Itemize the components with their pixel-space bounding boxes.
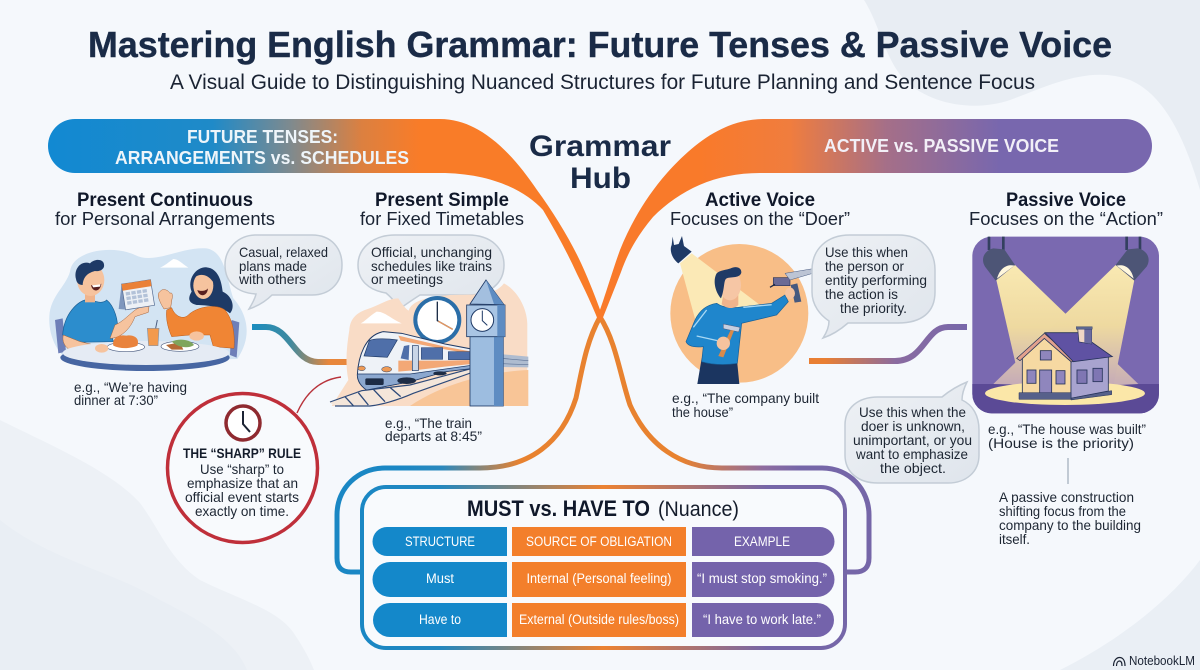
callout: when to use active: entity performing: [825, 272, 927, 288]
table row: have to: [373, 603, 834, 637]
heading: passive voice: [969, 189, 1163, 229]
note: passive construction: itself.: [999, 531, 1030, 547]
callout: casual plans: [225, 235, 342, 309]
illustration: train and clock tower: [330, 280, 528, 406]
example: dinner: e.g., “We’re having: [74, 379, 187, 395]
example: dinner: [74, 379, 187, 408]
example: train: e.g., “The train: [385, 415, 472, 431]
table header row: SOURCE OF OBLIGATION: [526, 534, 672, 549]
heading: present continuous: [55, 189, 275, 229]
connector: arrangements to schedules: [252, 327, 348, 362]
heading: present continuous: Present Continuous: [77, 189, 253, 211]
example: train: departs at 8:45”: [385, 428, 482, 444]
note: passive construction: [999, 489, 1141, 547]
callout: the sharp rule: Use “sharp” to: [200, 461, 284, 477]
table row: have to: Have to: [419, 612, 461, 627]
banner: future tenses: ARRANGEMENTS vs. SCHEDULES: [115, 148, 409, 168]
callout: the sharp rule: official event starts: [185, 489, 299, 505]
heading: present continuous: for Personal Arrangements: [55, 209, 275, 229]
heading: active voice: Active Voice: [705, 189, 815, 211]
table header row: STRUCTURE: [405, 534, 475, 549]
example: company built: [672, 390, 819, 420]
example: company built: the house”: [672, 404, 733, 420]
grammar hub label: Hub: [570, 162, 631, 195]
connecting hub curves to table frame: [337, 317, 869, 572]
illustration: active doer with spotlight: [670, 236, 815, 384]
table row: must: [372, 562, 834, 597]
callout: when to use active: [812, 235, 935, 338]
illustration: friends planning dinner: [49, 248, 247, 371]
callout: when to use passive: the object.: [880, 460, 946, 476]
table row: must: Internal (Personal feeling): [526, 571, 672, 586]
callout: casual plans: with others: [238, 271, 306, 287]
heading: active voice: [670, 189, 850, 229]
callout: when to use passive: Use this when the: [859, 404, 966, 420]
subtitle: A Visual Guide to Distinguishing Nuanced Structures for Future Planning and Sentence Focus: [170, 71, 1035, 94]
callout: the sharp rule: THE “SHARP” RULE: [183, 445, 301, 461]
callout: when to use passive: [845, 382, 979, 483]
example: train: [385, 415, 482, 444]
illustration: house under spotlights: [972, 237, 1159, 413]
callout: when to use active: the person or: [825, 258, 904, 274]
banner: future tenses: [48, 119, 603, 320]
callout: when to use passive: want to emphasize: [855, 446, 968, 462]
table header row: EXAMPLE: [734, 534, 790, 549]
heading: present simple: Present Simple: [375, 189, 509, 211]
logo: notebooklm: NotebookLM: [1129, 654, 1195, 668]
table heading: (Nuance): [658, 498, 739, 521]
callout: casual plans: Casual, relaxed: [239, 244, 328, 260]
callout: casual plans: plans made: [239, 258, 307, 274]
callout: official schedules: schedules like trains: [371, 258, 492, 274]
example: house was built: e.g., “The house was built”: [988, 421, 1146, 437]
example: house was built: (House is the priority): [988, 435, 1134, 451]
icon: clock: [226, 406, 260, 440]
callout: when to use active: the priority.: [840, 300, 907, 316]
table row: must: “I must stop smoking.”: [697, 571, 827, 586]
callout: when to use passive: unimportant, or you: [853, 432, 972, 448]
note: passive construction: company to the building: [999, 517, 1141, 533]
grammar hub label: [529, 130, 671, 195]
callout: the sharp rule: emphasize that an: [187, 475, 298, 491]
callout: the sharp rule: [168, 394, 318, 542]
note: passive construction: shifting focus from the: [999, 503, 1126, 519]
example: company built: e.g., “The company built: [672, 390, 819, 406]
banner: future tenses: FUTURE TENSES:: [187, 127, 338, 147]
grammar hub label: Grammar: [529, 130, 671, 163]
note: passive construction: A passive construction: [999, 489, 1134, 505]
table header row: [372, 527, 834, 556]
table row: must: Must: [426, 571, 454, 586]
heading: present simple: [360, 189, 524, 229]
title: Mastering English Grammar: Future Tenses & Passive Voice: [88, 24, 1112, 65]
banner: active vs passive voice: ACTIVE vs. PASSIVE VOICE: [824, 136, 1059, 156]
panel: must vs have to table: [362, 487, 845, 648]
callout: when to use passive: doer is unknown,: [861, 418, 965, 434]
heading: passive voice: Focuses on the “Action”: [969, 209, 1163, 229]
table row: have to: External (Outside rules/boss): [519, 612, 679, 627]
heading: present simple: for Fixed Timetables: [360, 209, 524, 229]
heading: passive voice: Passive Voice: [1006, 189, 1126, 211]
callout: official schedules: Official, unchanging: [371, 244, 492, 260]
example: dinner: dinner at 7:30”: [74, 392, 158, 408]
connector: active to passive: [809, 327, 967, 361]
heading: active voice: Focuses on the “Doer”: [670, 209, 850, 229]
callout: official schedules: [358, 235, 504, 310]
callout: when to use active: the action is: [825, 286, 898, 302]
table row: have to: “I have to work late.”: [703, 612, 821, 627]
red link line: [297, 377, 341, 413]
banner: active vs passive voice: [597, 119, 1152, 320]
callout: official schedules: or meetings: [371, 271, 443, 287]
table heading: MUST vs. HAVE TO: [467, 496, 650, 521]
callout: the sharp rule: exactly on time.: [195, 503, 289, 519]
example: house was built: [988, 421, 1146, 451]
callout: when to use active: Use this when: [825, 244, 908, 260]
